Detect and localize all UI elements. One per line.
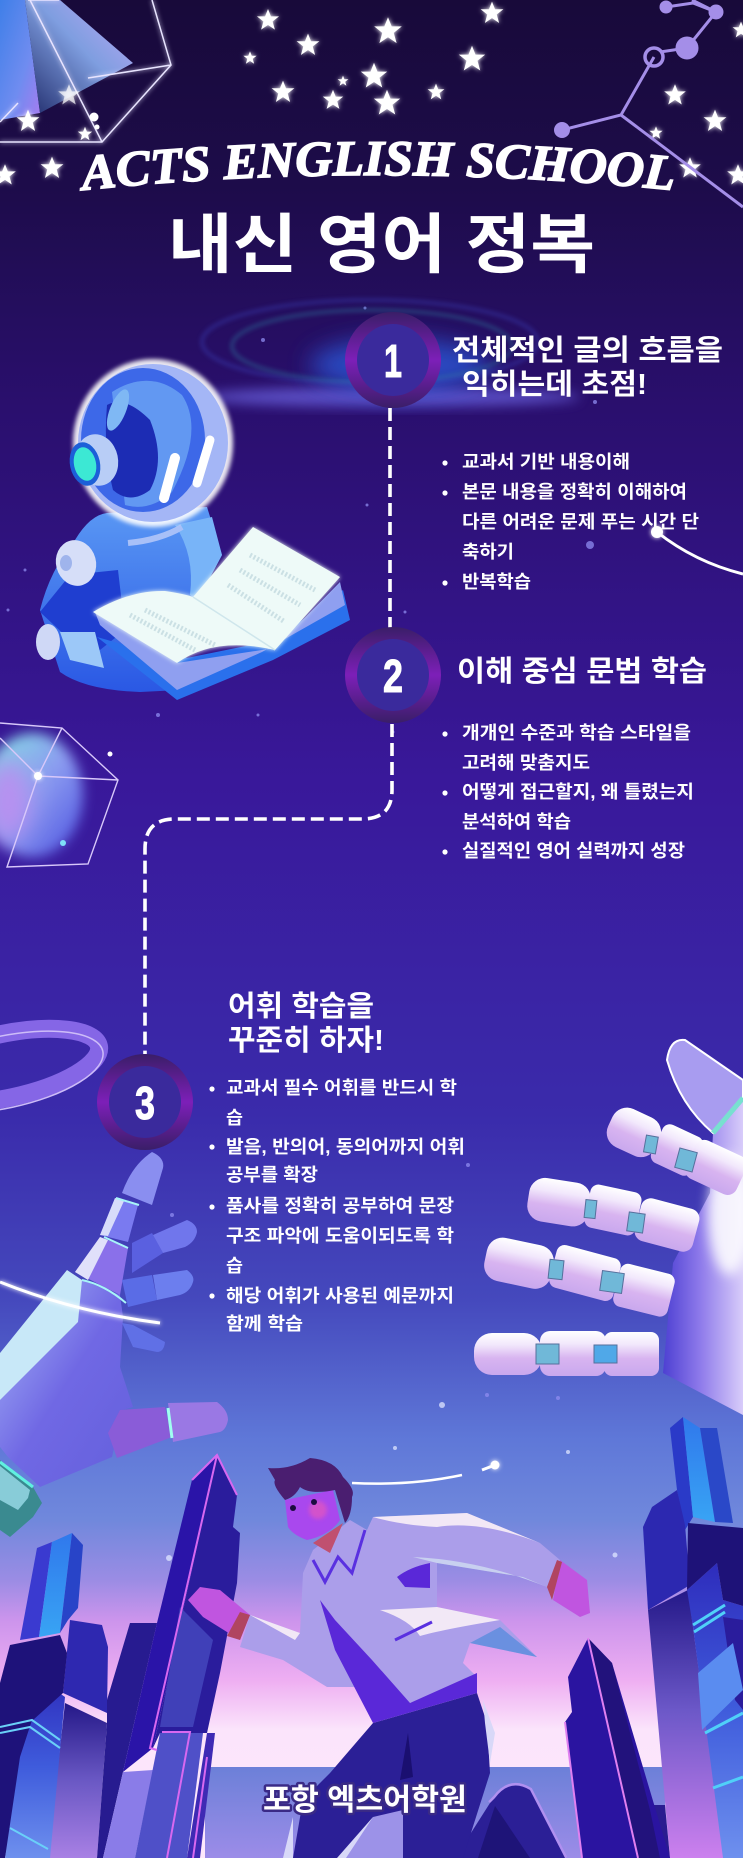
step 2 heading: 이해 중심 문법 학습	[457, 655, 707, 688]
step 2 number badge: 2	[383, 650, 403, 702]
palm	[663, 1100, 743, 1415]
nebula behind step 1	[200, 300, 580, 407]
pointing finger	[75, 1152, 163, 1295]
step 3 number badge: 3	[135, 1077, 155, 1129]
illustration: glass cube with orb	[0, 723, 118, 867]
fingers	[474, 1102, 743, 1376]
other fingers	[122, 1220, 197, 1352]
title: Korean headline: 내신 영어 정복	[168, 208, 595, 281]
hair	[268, 1458, 353, 1523]
trouser crease	[400, 1733, 413, 1780]
step 2	[345, 627, 707, 861]
eyes	[290, 1499, 317, 1511]
right hand	[547, 1560, 590, 1617]
step 1 number badge: 1	[384, 335, 402, 387]
left hand	[188, 1587, 250, 1640]
gap between legs	[340, 1810, 403, 1858]
robot helmet	[73, 359, 233, 527]
illustration: floating ring	[0, 1015, 110, 1128]
illustration: left tower	[0, 1533, 108, 1858]
finger joints	[536, 1135, 697, 1364]
back leg outline	[490, 1786, 565, 1858]
shooting star glow	[490, 1460, 500, 1470]
book: cover and page block	[93, 527, 350, 700]
step 1 bullets: 축하기	[462, 542, 514, 562]
step 3 bullets: 교과서 필수 어휘를 반드시 학	[226, 1078, 457, 1098]
step 3 bullets: 발음, 반의어, 동의어까지 어휘	[226, 1137, 465, 1157]
step 2 bullets: 분석하여 학습	[462, 812, 571, 832]
step 3	[97, 990, 465, 1334]
illustration: left robot hand	[0, 1152, 228, 1537]
step 3 bullets: 습	[226, 1256, 243, 1276]
step 1 bullets: 교과서 기반 내용이해	[462, 452, 630, 472]
horizon sea band	[205, 1767, 665, 1858]
step 3 bullets: 해당 어휘가 사용된 예문까지	[226, 1286, 454, 1306]
constellation	[556, 0, 743, 207]
illustration: right robot hand	[474, 1040, 743, 1415]
illustration: right tower	[643, 1417, 743, 1858]
back leg	[455, 1786, 565, 1858]
step 3 bullets: 함께 학습	[226, 1314, 303, 1334]
step 2 bullets: 어떻게 접근할지, 왜 틀렸는지	[462, 782, 694, 802]
step 3 bullets: 품사를 정확히 공부하여 문장	[226, 1196, 454, 1216]
illustration: glass cube with pyramid	[0, 0, 171, 142]
shirt lower sleeve highlight	[413, 1557, 547, 1587]
step 2 bullets: 개개인 수준과 학습 스타일을	[462, 723, 691, 743]
thumb	[108, 1402, 228, 1458]
cheek	[309, 1501, 327, 1519]
step 1 number badge	[345, 312, 441, 408]
trouser highlights	[283, 1700, 495, 1858]
shooting star: behind man	[352, 1475, 462, 1484]
step 1 bullets: 반복학습	[462, 572, 531, 592]
step 2 bullets	[442, 723, 694, 861]
thumb cuff	[713, 1098, 743, 1133]
shirt	[240, 1513, 560, 1703]
step 2 bullets: 고려해 맞춤지도	[462, 753, 590, 773]
robot ear light	[66, 430, 123, 490]
shoe shadow	[478, 1806, 530, 1858]
palm	[0, 1280, 133, 1487]
step 3 bullets: 습	[226, 1108, 243, 1128]
shooting star: right of step 1	[657, 532, 743, 574]
step 3 bullets	[209, 1078, 465, 1334]
step 1 bullets: 본문 내용을 정확히 이해하여	[462, 482, 687, 502]
step 1	[345, 312, 723, 592]
illustration: man running	[188, 1458, 590, 1858]
step 3 heading: 꾸준히 하자!	[228, 1024, 384, 1057]
step 3 heading	[228, 990, 384, 1057]
illustration: robot reading a book	[36, 359, 350, 700]
stars cluster	[0, 2, 743, 184]
step 2 bullets: 실질적인 영어 실력까지 성장	[462, 841, 685, 861]
step 3 bullets: 구조 파악에 도움이되도록 학	[226, 1226, 454, 1246]
step 3 bullets: 공부를 확장	[226, 1165, 318, 1185]
step 1 heading: 익히는데 초점!	[462, 368, 647, 401]
wrist cuff	[0, 1460, 42, 1537]
trousers	[293, 1693, 490, 1858]
thumb	[667, 1040, 743, 1133]
illustration: small foreground tower	[565, 1638, 670, 1858]
face	[285, 1490, 340, 1540]
shirt back shadow	[470, 1627, 537, 1657]
step 1 bullets	[442, 452, 699, 592]
shirt hole	[397, 1563, 430, 1588]
collar	[313, 1530, 432, 1640]
shooting star head	[482, 1465, 495, 1470]
step 1 heading	[452, 334, 723, 401]
illustration: tall tower with neon edge	[97, 1455, 240, 1858]
shooting star head	[651, 526, 663, 538]
dashed timeline connector	[145, 408, 392, 1054]
step 3 heading: 어휘 학습을	[228, 990, 374, 1023]
shirt underside	[320, 1600, 477, 1723]
footer: academy name: 포항 엑츠어학원	[263, 1784, 467, 1817]
neck	[313, 1523, 343, 1553]
step 2 number badge	[345, 627, 441, 723]
shirt highlights	[250, 1513, 540, 1640]
step 3 number badge	[97, 1054, 193, 1150]
background dust stars	[6, 306, 618, 1561]
title: ACTS ENGLISH SCHOOL: ACTS ENGLISH SCHOOL	[80, 141, 674, 192]
step 1 heading: 전체적인 글의 흐름을	[452, 334, 723, 367]
step 1 bullets: 다른 어려운 문제 푸는 시간 단	[462, 512, 699, 532]
